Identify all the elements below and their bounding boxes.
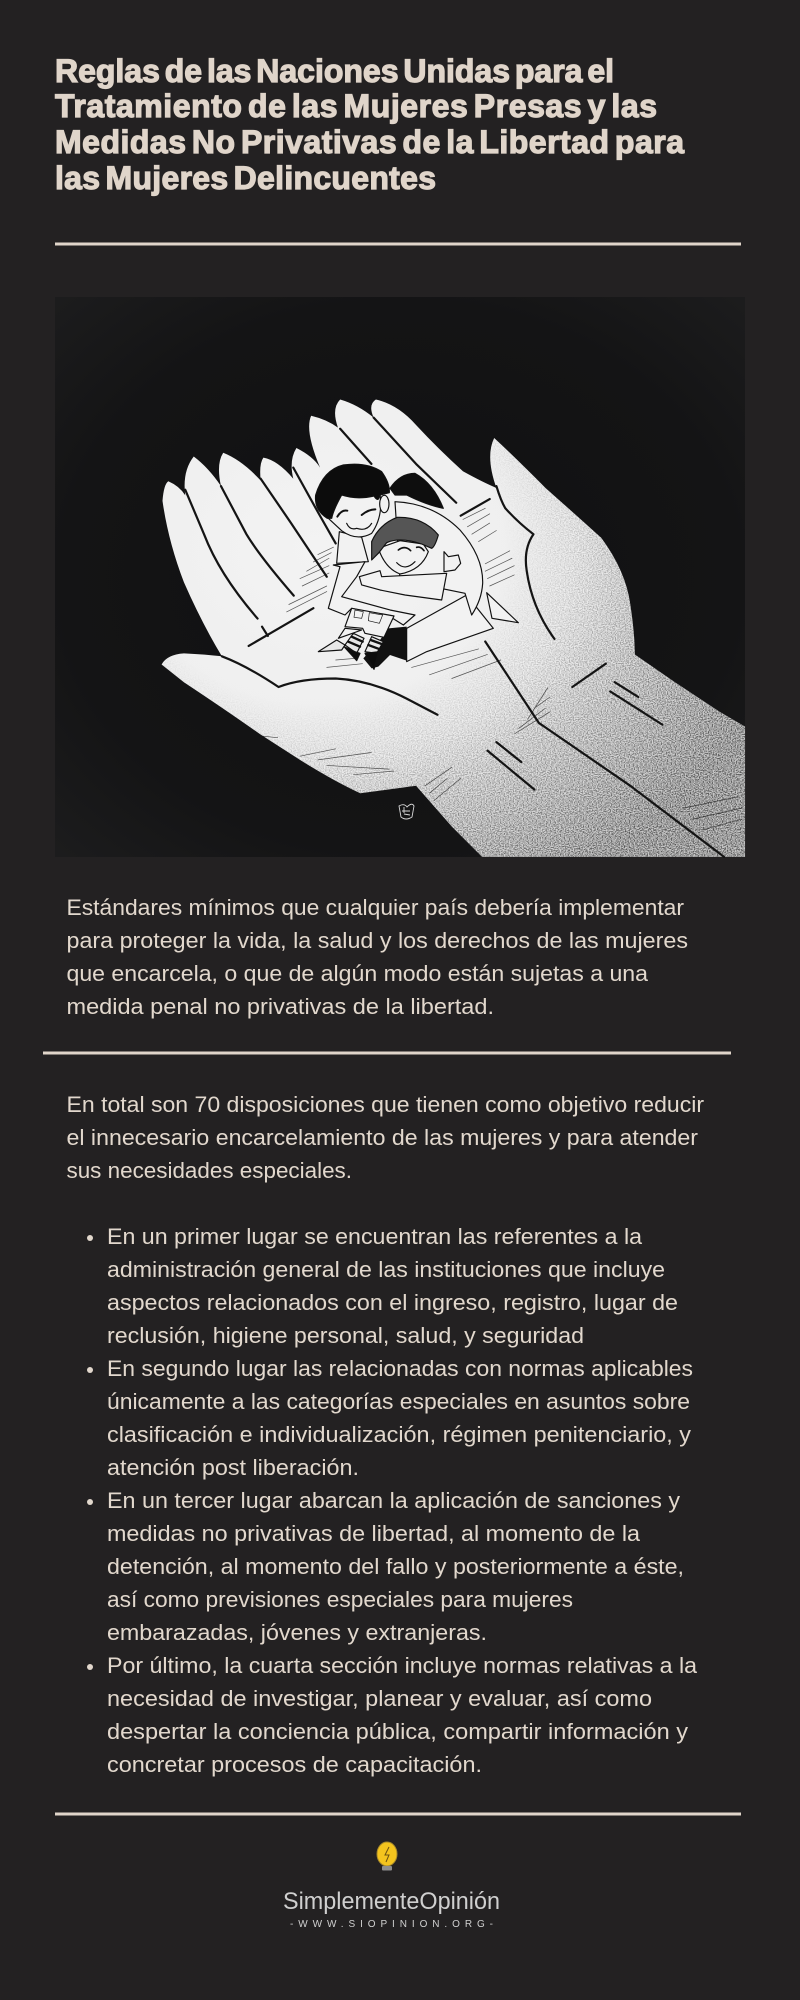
- list item 2: únicamente a las categorías especiales en asuntos sobre: [107, 1389, 690, 1414]
- list item 4: necesidad de investigar, planear y evaluar, así como: [107, 1686, 652, 1711]
- second text block: el innecesario encarcelamiento de las mujeres y para atender: [66, 1125, 699, 1150]
- title: Tratamiento de las Mujeres Presas y las: [55, 88, 657, 124]
- list item 4: concretar procesos de capacitación.: [107, 1752, 482, 1777]
- intro text block: [66, 895, 688, 1019]
- woman's head: [315, 464, 389, 563]
- list item 3: detención, al momento del fallo y posteriormente a éste,: [107, 1554, 684, 1579]
- list item 3: medidas no privativas de libertad, al momento de la: [107, 1521, 641, 1546]
- list item 3: así como previsiones especiales para mujeres: [107, 1587, 573, 1612]
- illustration: hands holding mother and child: [50, 290, 750, 870]
- intro text block: medida penal no privativas de la libertad.: [66, 994, 494, 1019]
- list item 3: [87, 1488, 684, 1645]
- second text block: [66, 1092, 705, 1183]
- list item 1: reclusión, higiene personal, salud, y seguridad: [107, 1323, 584, 1348]
- list item 1: aspectos relacionados con el ingreso, registro, lugar de: [107, 1290, 678, 1315]
- list item 4: despertar la conciencia pública, compartir información y: [107, 1719, 689, 1744]
- list item 4: [87, 1653, 697, 1777]
- ponytail: [390, 473, 443, 508]
- second text block: En total son 70 disposiciones que tienen como objetivo reducir: [66, 1092, 705, 1117]
- list item 1: [87, 1224, 678, 1348]
- list item 1: administración general de las instituciones que incluye: [107, 1257, 665, 1282]
- intro text block: Estándares mínimos que cualquier país debería implementar: [66, 895, 685, 920]
- footer logo: [283, 1842, 500, 1930]
- woman's back and skirt: [395, 502, 518, 662]
- website: -WWW.SIOPINION.ORG-: [290, 1919, 493, 1930]
- icon: artist signature: [399, 804, 414, 819]
- brand name: SimplementeOpinión: [283, 1888, 500, 1915]
- bullet list: [87, 1224, 697, 1777]
- intro text block: para proteger la vida, la salud y los derechos de las mujeres: [66, 928, 688, 953]
- list item 2: atención post liberación.: [107, 1455, 359, 1480]
- intro text block: que encarcela, o que de algún modo están sujetas a una: [66, 961, 648, 986]
- list item 3: embarazadas, jóvenes y extranjeras.: [107, 1620, 487, 1645]
- list item 2: clasificación e individualización, régimen penitenciario, y: [107, 1422, 692, 1447]
- list item 1: En un primer lugar se encuentran las referentes a la: [107, 1224, 642, 1249]
- title: Medidas No Privativas de la Libertad para: [55, 124, 684, 160]
- woman's hand: [444, 552, 461, 572]
- list item 2: [87, 1356, 693, 1480]
- arms, shorts and legs: [318, 562, 447, 669]
- title: [55, 53, 684, 196]
- boy's head: [372, 517, 438, 574]
- title: las Mujeres Delincuentes: [55, 160, 436, 196]
- icon: cupped hands: [162, 400, 746, 858]
- list item 2: En segundo lugar las relacionadas con normas aplicables: [107, 1356, 693, 1381]
- icon: light bulb: [377, 1842, 397, 1870]
- icon: mother hugging child: [315, 464, 518, 669]
- second text block: sus necesidades especiales.: [66, 1158, 352, 1183]
- list item 4: Por último, la cuarta sección incluye normas relativas a la: [107, 1653, 697, 1678]
- title: Reglas de las Naciones Unidas para el: [55, 53, 614, 89]
- list item 3: En un tercer lugar abarcan la aplicación de sanciones y: [107, 1488, 681, 1513]
